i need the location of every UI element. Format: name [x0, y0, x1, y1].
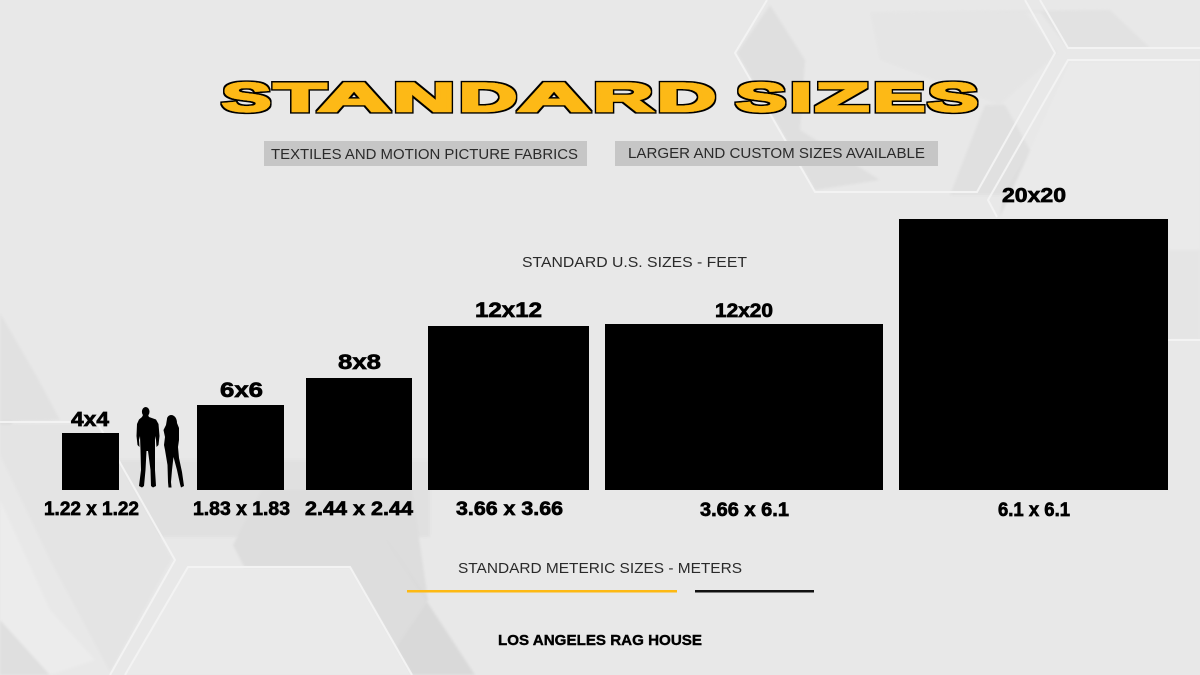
- size 12x20: 12x20: [715, 301, 773, 322]
- heading: US sizes: STANDARD U.S. SIZES - FEET: [522, 254, 747, 271]
- chip: textiles: TEXTILES AND MOTION PICTURE FABRICS: [271, 146, 578, 163]
- title: T: [274, 76, 326, 120]
- size 8x8: [305, 351, 413, 520]
- title: S: [222, 76, 271, 120]
- size 12x20: 3.66 x 6.1: [700, 499, 789, 521]
- size 4x4: [44, 409, 139, 520]
- chip: larger sizes: LARGER AND CUSTOM SIZES AVAILABLE: [628, 145, 925, 162]
- size 8x8: 2.44 x 2.44: [305, 498, 413, 520]
- title: I: [790, 76, 812, 120]
- title: N: [393, 76, 455, 120]
- size 20x20: [899, 185, 1168, 521]
- size 20x20: 6.1 x 6.1: [998, 499, 1070, 521]
- title: Z: [815, 76, 869, 120]
- accent rule: black: [695, 590, 814, 592]
- size 6x6: 6x6: [220, 379, 263, 402]
- size 12x20: [605, 301, 883, 521]
- title: [222, 76, 978, 120]
- size 4x4: 4x4: [71, 409, 110, 431]
- footer: company name: LOS ANGELES RAG HOUSE: [498, 632, 702, 649]
- title: E: [873, 76, 925, 120]
- chip: textiles: [264, 141, 587, 166]
- title: A: [318, 76, 390, 120]
- heading: metric sizes: STANDARD METERIC SIZES - METERS: [458, 560, 742, 577]
- size 12x12: 12x12: [475, 299, 542, 322]
- accent rule: yellow: [407, 590, 677, 592]
- title: D: [459, 76, 517, 120]
- icon: people silhouettes: [136, 407, 184, 488]
- size 6x6: [193, 379, 290, 520]
- size 8x8: 8x8: [338, 351, 381, 374]
- title: D: [657, 76, 716, 120]
- size 12x12: 3.66 x 3.66: [456, 498, 563, 520]
- size 12x12: [428, 299, 589, 520]
- title: S: [736, 76, 786, 120]
- size 6x6: 1.83 x 1.83: [193, 498, 290, 520]
- title: R: [593, 76, 653, 120]
- size 20x20: 20x20: [1002, 185, 1066, 207]
- title: S: [928, 76, 978, 120]
- title: A: [518, 76, 590, 120]
- size 4x4: 1.22 x 1.22: [44, 498, 139, 520]
- chip: larger sizes: [615, 141, 938, 166]
